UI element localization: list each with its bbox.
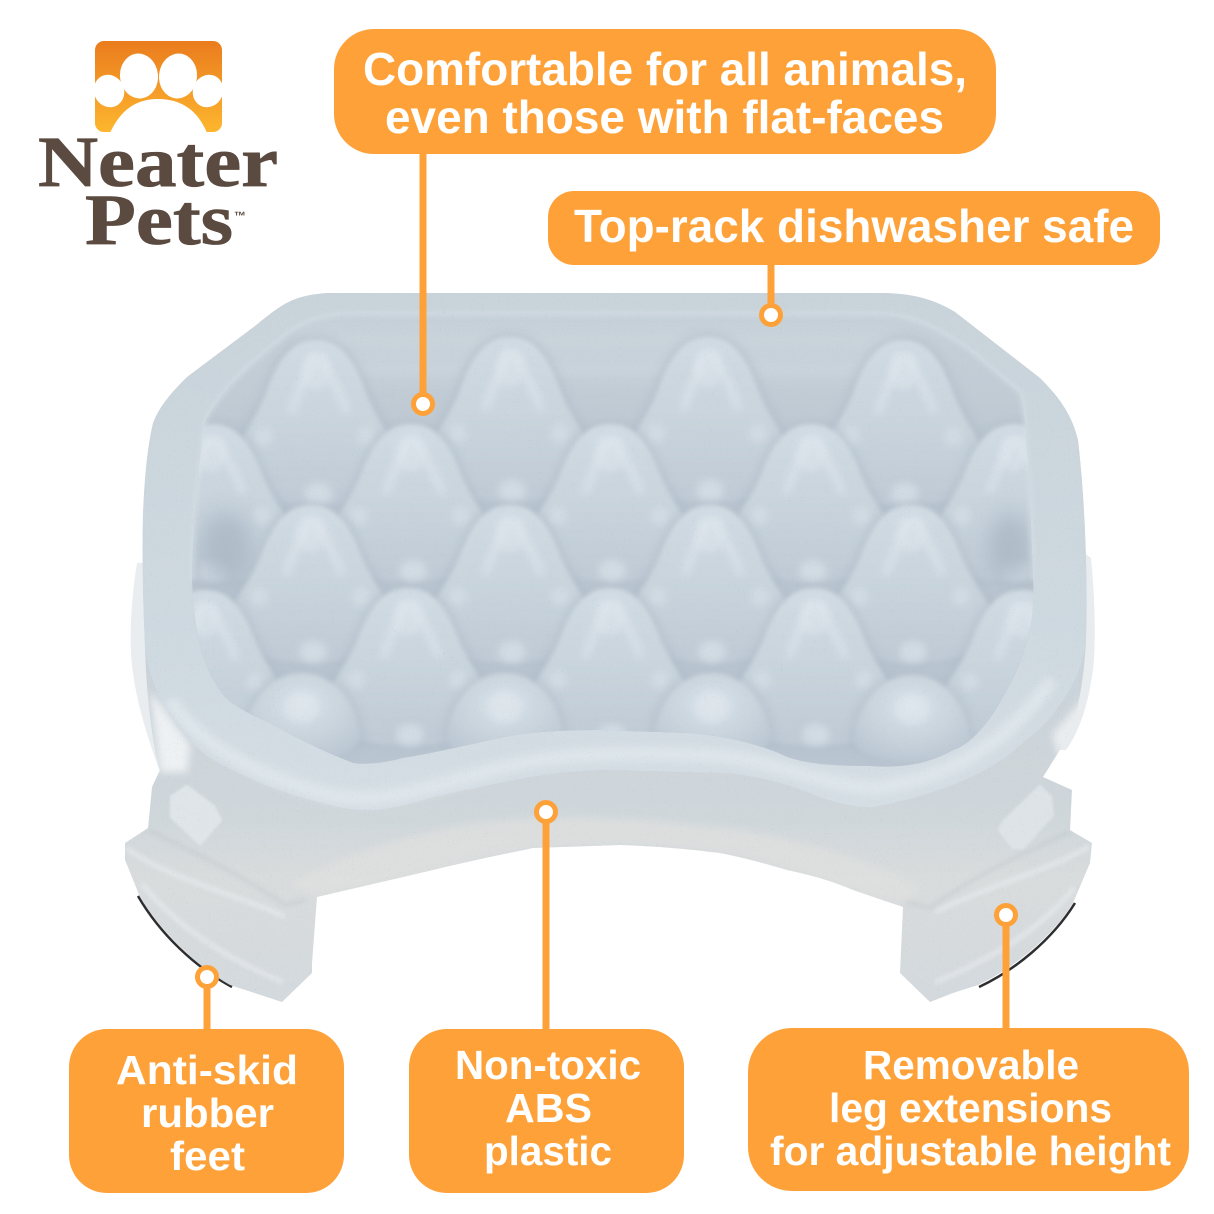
pill (548, 191, 1160, 265)
front face speckled band (378, 820, 812, 852)
leader line (198, 968, 216, 1034)
row 1 bumps (248, 340, 974, 504)
bowl body (110, 280, 1110, 1010)
row 3 bumps (213, 501, 1009, 666)
side straps (131, 553, 1095, 772)
edge shadows (200, 512, 252, 584)
leader line (996, 906, 1016, 1032)
label (770, 1042, 1171, 1174)
pill (748, 1028, 1189, 1191)
label (455, 1042, 641, 1174)
callout: comfortable (334, 29, 996, 414)
wordmark (38, 122, 278, 260)
label: Comfortable for all animals, (363, 43, 967, 95)
callout: anti-skid (69, 968, 344, 1193)
label: rubber (141, 1090, 274, 1136)
leader line (762, 260, 780, 324)
rubber feet (138, 817, 1075, 987)
lock tabs (172, 787, 1052, 847)
callout: leg extensions (748, 906, 1189, 1191)
basin lip (192, 314, 1033, 580)
label: ABS (505, 1085, 592, 1131)
label: plastic (484, 1128, 612, 1174)
pill (69, 1029, 344, 1193)
leg ledges (246, 880, 975, 908)
rim highlight (170, 680, 1052, 798)
callout: dishwasher (548, 191, 1160, 324)
leg details (126, 846, 1090, 982)
wordmark: Neater (38, 122, 278, 202)
icon: paw (88, 41, 229, 133)
speckle (120, 290, 1100, 1005)
basin (192, 332, 1034, 766)
strap glare right (1051, 700, 1078, 754)
label: feet (170, 1133, 245, 1179)
label: leg extensions (829, 1085, 1112, 1131)
leader line (414, 150, 432, 414)
pill (334, 29, 996, 154)
callout: non-toxic (409, 802, 684, 1193)
wordmark: ™ (234, 209, 246, 223)
logo: Neater Pets (38, 41, 278, 260)
rim surface (207, 293, 1012, 810)
row 5 domes (260, 674, 960, 752)
label (116, 1047, 298, 1179)
product: slow feeder bowl (107, 280, 1120, 1010)
label: Removable (863, 1042, 1079, 1088)
row 4 bumps (193, 588, 1034, 747)
leader line (536, 802, 556, 1034)
back wall shading (300, 330, 900, 380)
wordmark: Pets (85, 180, 233, 260)
label: for adjustable height (770, 1128, 1171, 1174)
row 2 bumps (196, 424, 1030, 582)
label: Anti-skid (116, 1047, 298, 1093)
label: even those with flat-faces (385, 91, 944, 143)
pill (409, 1029, 684, 1193)
strap glare left (150, 690, 190, 772)
label (363, 43, 967, 143)
label: Top-rack dishwasher safe (574, 200, 1134, 252)
label: Non-toxic (455, 1042, 641, 1088)
